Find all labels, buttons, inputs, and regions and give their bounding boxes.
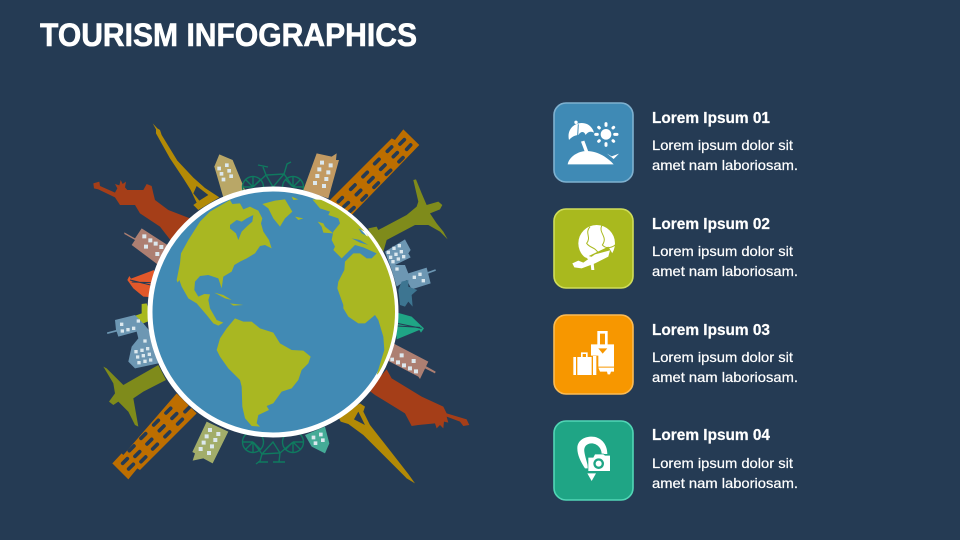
card 4 — [554, 421, 798, 500]
eiffel tower lower — [338, 403, 415, 483]
card 1 — [554, 103, 798, 182]
tan building — [303, 153, 339, 198]
landmarks upper right — [303, 129, 448, 307]
teal boat — [395, 312, 424, 339]
pink building lower — [387, 343, 436, 379]
body 4: amet nam laboriosam. — [652, 475, 798, 491]
umbrella — [569, 123, 594, 140]
bicycle upper — [242, 162, 304, 198]
icon tile: luggage — [554, 315, 633, 394]
large suitcase — [591, 331, 614, 374]
heading 2: Lorem Ipsum 02 — [652, 216, 770, 233]
camera — [588, 454, 610, 471]
icon tile: beach — [554, 103, 633, 182]
blue buildings upper — [385, 239, 436, 289]
plane icon — [570, 247, 613, 273]
teal building — [305, 427, 329, 453]
sun — [601, 129, 611, 140]
heading 4: Lorem Ipsum 04 — [652, 427, 770, 444]
card 2 — [554, 209, 798, 288]
landmarks upper left — [93, 123, 245, 297]
statue of liberty lower — [368, 369, 469, 428]
body 2: Lorem ipsum dolor sit — [652, 243, 793, 259]
body 2: amet nam laboriosam. — [652, 263, 798, 279]
orange boat — [127, 270, 155, 297]
body 3: amet nam laboriosam. — [652, 369, 798, 385]
small suitcases — [573, 352, 596, 375]
eiffel tower upper — [153, 123, 219, 210]
body 3: Lorem ipsum dolor sit — [652, 349, 793, 365]
globe — [150, 189, 402, 435]
title: TOURISM INFOGRAPHICS — [40, 17, 417, 53]
pink building upper — [124, 228, 170, 265]
ocean — [150, 189, 396, 435]
map pin — [577, 437, 607, 468]
body 1: amet nam laboriosam. — [652, 157, 798, 173]
pale green building — [192, 422, 228, 463]
christ statue lower — [103, 365, 166, 427]
icon tile: pin and camera — [554, 421, 633, 500]
europe and africa — [312, 199, 402, 375]
landmarks ring — [93, 123, 469, 483]
south america — [217, 318, 311, 427]
body 1: Lorem ipsum dolor sit — [652, 137, 793, 153]
orange tower upper — [330, 129, 419, 218]
heading 1: Lorem Ipsum 01 — [652, 110, 770, 127]
umbrella pole and sand — [581, 141, 588, 152]
green shape — [133, 303, 152, 324]
card 3 — [554, 315, 798, 394]
caribbean — [214, 293, 243, 306]
continents — [177, 197, 402, 427]
greenland — [262, 197, 303, 227]
globe icon — [578, 225, 615, 262]
landmarks lower right — [305, 312, 469, 483]
statue of liberty upper — [93, 180, 190, 242]
body 4: Lorem ipsum dolor sit — [652, 455, 793, 471]
heading 3: Lorem Ipsum 03 — [652, 322, 770, 339]
christ statue upper — [368, 179, 448, 252]
landmarks lower left — [103, 303, 228, 479]
orange tower lower — [112, 393, 197, 479]
bicycle lower — [242, 432, 304, 464]
icon tile: globe and plane — [554, 209, 633, 288]
bird — [607, 154, 619, 159]
cream building — [214, 154, 245, 197]
north america — [177, 197, 303, 326]
blue plane — [398, 280, 417, 307]
blue buildings lower — [107, 315, 158, 368]
